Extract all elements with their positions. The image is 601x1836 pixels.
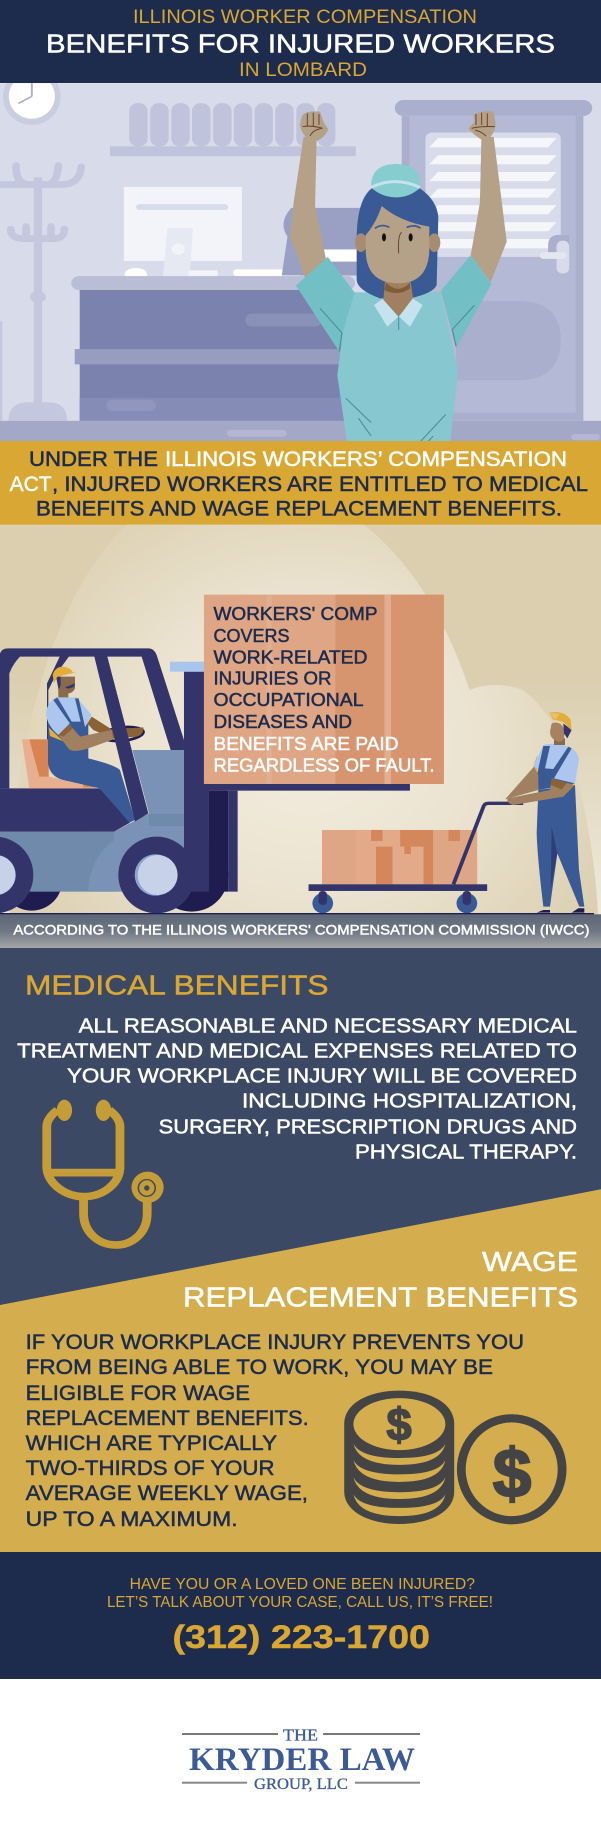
- single coin: [457, 1414, 567, 1524]
- heading: wage replacement benefits: REPLACEMENT BENEFITS: [183, 1282, 578, 1313]
- icon: dollar coins: $: [386, 1399, 412, 1450]
- warehouse background domes: [0, 525, 601, 915]
- footer logo: the kryder law group: GROUP, LLC: [254, 1776, 348, 1793]
- callout band: act statement: ILLINOIS WORKERS’ COMPENSATION: [165, 448, 567, 471]
- text block: workers comp fault: WORKERS' COMP: [214, 604, 378, 624]
- text block: workers comp fault: DISEASES AND: [214, 712, 352, 732]
- text block: medical description: [17, 1016, 577, 1164]
- phone number: (312) 223-1700: [172, 1619, 430, 1655]
- door: [395, 100, 592, 421]
- footer logo: the kryder law group: KRYDER LAW: [189, 1742, 415, 1778]
- heading: wage replacement benefits: WAGE: [482, 1246, 578, 1277]
- illustration: forklift and warehouse: [0, 525, 601, 915]
- forklift: [0, 648, 410, 913]
- text block: workers comp fault: OCCUPATIONAL: [214, 690, 364, 710]
- nurse cap: [371, 164, 421, 197]
- panel: wage replacement benefits: [0, 1189, 601, 1552]
- floor: [0, 421, 601, 441]
- coat rack: [0, 166, 81, 421]
- steering wheel: [101, 725, 144, 743]
- callout band: act statement: UNDER THE: [29, 448, 158, 471]
- shelf with binders: [110, 103, 356, 156]
- callout band: act statement: , INJURED WORKERS ARE ENTITLED TO MEDICAL: [52, 473, 588, 496]
- text block: workers comp fault: REGARDLESS OF FAULT.: [214, 755, 434, 775]
- text block: medical description: PHYSICAL THERAPY.: [355, 1142, 577, 1164]
- text block: wage description: IF YOUR WORKPLACE INJURY PREVENTS YOU: [26, 1331, 524, 1354]
- heading: medical benefits: MEDICAL BENEFITS: [25, 969, 328, 1000]
- source strip: [0, 914, 601, 948]
- office chair: [282, 208, 360, 275]
- heading: wage replacement benefits: [183, 1246, 578, 1313]
- text block: medical description: SURGERY, PRESCRIPTION DRUGS AND: [159, 1116, 577, 1138]
- callout band: act statement: BENEFITS AND WAGE REPLACEMENT BENEFITS.: [36, 498, 562, 520]
- panel: medical benefits: [0, 948, 601, 1308]
- forklift body: [0, 750, 184, 892]
- text block: workers comp fault: WORK-RELATED: [214, 647, 368, 667]
- text block: wage description: TWO-THIRDS OF YOUR: [26, 1457, 275, 1480]
- call to action band: HAVE YOU OR A LOVED ONE BEEN INJURED?: [130, 1576, 475, 1593]
- nurse hair: [357, 188, 438, 298]
- nurse body: [290, 137, 507, 441]
- reception desk: [71, 276, 355, 421]
- raised fists: [300, 111, 496, 142]
- nurse face: [355, 206, 440, 283]
- forklift wheels: [0, 837, 195, 913]
- coin stack: [344, 1391, 454, 1524]
- callout band: act statement: [0, 441, 601, 525]
- icon: stethoscope: [47, 1100, 164, 1245]
- icon: dollar coins: [344, 1391, 567, 1524]
- nurse arms: [290, 137, 507, 282]
- warehouse worker: [505, 712, 584, 913]
- text block: wage description: AVERAGE WEEKLY WAGE,: [26, 1482, 308, 1505]
- header: title band: [0, 0, 601, 83]
- forklift driver: [46, 667, 143, 823]
- header: title band: IN LOMBARD: [239, 60, 367, 81]
- nurse sleeves: [296, 255, 491, 352]
- forklift rear and front tyre shadows: [1, 838, 228, 912]
- cab rear wedge: [47, 656, 69, 740]
- call to action band: [0, 1552, 601, 1679]
- callout band: act statement: ACT: [10, 473, 52, 496]
- text block: workers comp fault: COVERS: [214, 626, 290, 646]
- text block: workers comp fault: BENEFITS ARE PAID: [214, 734, 398, 754]
- text block: wage description: ELIGIBLE FOR WAGE: [26, 1382, 250, 1405]
- text block: wage description: UP TO A MAXIMUM.: [26, 1508, 238, 1531]
- icon: dollar coins: $: [493, 1435, 531, 1512]
- header: title band: BENEFITS FOR INJURED WORKERS: [46, 28, 555, 58]
- nurse neck: [383, 282, 413, 317]
- footer logo: the kryder law group: [182, 1726, 420, 1793]
- text block: medical description: TREATMENT AND MEDICAL EXPENSES RELATED TO: [17, 1041, 577, 1063]
- text block: wage description: REPLACEMENT BENEFITS.: [26, 1407, 309, 1430]
- text block: wage description: FROM BEING ABLE TO WORK, YOU MAY BE: [26, 1356, 493, 1379]
- hand cart with boxes: [309, 803, 523, 913]
- computer monitor: [124, 187, 302, 276]
- call to action band: LET’S TALK ABOUT YOUR CASE, CALL US, IT’S FREE!: [107, 1594, 493, 1611]
- nurse scrubs torso: [337, 292, 458, 441]
- text block: medical description: ALL REASONABLE AND NECESSARY MEDICAL: [79, 1016, 577, 1038]
- footer logo: the kryder law group: THE: [283, 1726, 318, 1745]
- illustration: nurse celebrating in office: [0, 68, 601, 441]
- nurse collar: [374, 298, 423, 327]
- text block: workers comp fault: [214, 604, 434, 775]
- text block: wage description: [26, 1331, 524, 1531]
- text block: medical description: YOUR WORKPLACE INJURY WILL BE COVERED: [67, 1066, 577, 1088]
- text block: workers comp fault: INJURIES OR: [214, 669, 332, 689]
- text block: medical description: INCLUDING HOSPITALIZATION,: [242, 1091, 577, 1113]
- forklift seat: [22, 739, 100, 788]
- source strip: ACCORDING TO THE ILLINOIS WORKERS' COMPENSATION COMMISSION (IWCC): [13, 921, 589, 937]
- large carton behind text: [204, 595, 444, 784]
- forklift mast: [170, 662, 410, 892]
- nurse head and fists: [300, 111, 496, 330]
- forklift cab frame: [0, 648, 184, 822]
- icon: wall clock: [3, 83, 60, 125]
- header: title band: ILLINOIS WORKER COMPENSATION: [133, 7, 477, 28]
- text block: wage description: WHICH ARE TYPICALLY: [26, 1432, 277, 1455]
